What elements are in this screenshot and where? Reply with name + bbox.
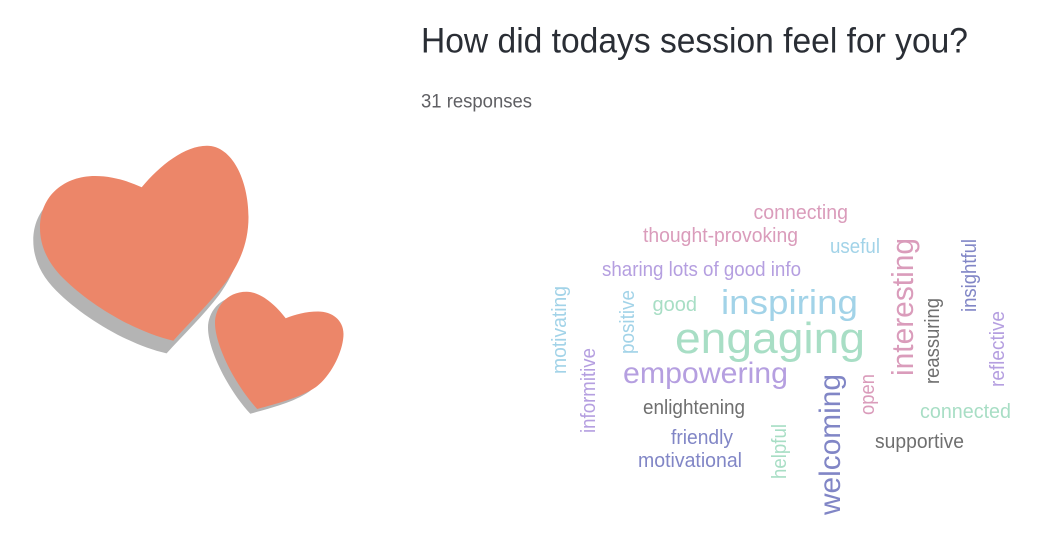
word: sharing lots of good info: sharing lots of good info [602,258,801,281]
word: friendly: friendly [671,426,734,449]
word: connected: connected [920,400,1011,423]
word: supportive: supportive [875,430,964,453]
word: reflective: reflective [986,311,1009,387]
word: helpful: helpful [768,424,791,479]
word: motivational: motivational [638,449,742,472]
title: How did todays session feel for you? [421,22,968,60]
word cloud [548,201,1011,516]
word: engaging: engaging [675,314,865,363]
word: interesting: interesting [885,238,920,376]
icon: large heart [33,146,248,353]
word: inspiring: inspiring [721,284,858,322]
icon: two hearts [33,146,344,414]
word: connecting: connecting [754,201,848,224]
word: reassuring: reassuring [921,298,944,384]
response count: 31 responses [421,90,532,112]
word: informitive: informitive [577,348,600,433]
word: motivating: motivating [548,286,571,374]
word: welcoming: welcoming [814,374,847,516]
word: enlightening: enlightening [643,396,745,419]
word: insightful: insightful [958,239,981,312]
word: good: good [652,293,697,316]
word: useful: useful [830,235,880,258]
word: empowering: empowering [623,357,788,390]
word: thought-provoking: thought-provoking [643,224,798,247]
word: positive: positive [616,290,639,354]
word: open: open [856,374,879,415]
icon: small heart [208,292,344,414]
